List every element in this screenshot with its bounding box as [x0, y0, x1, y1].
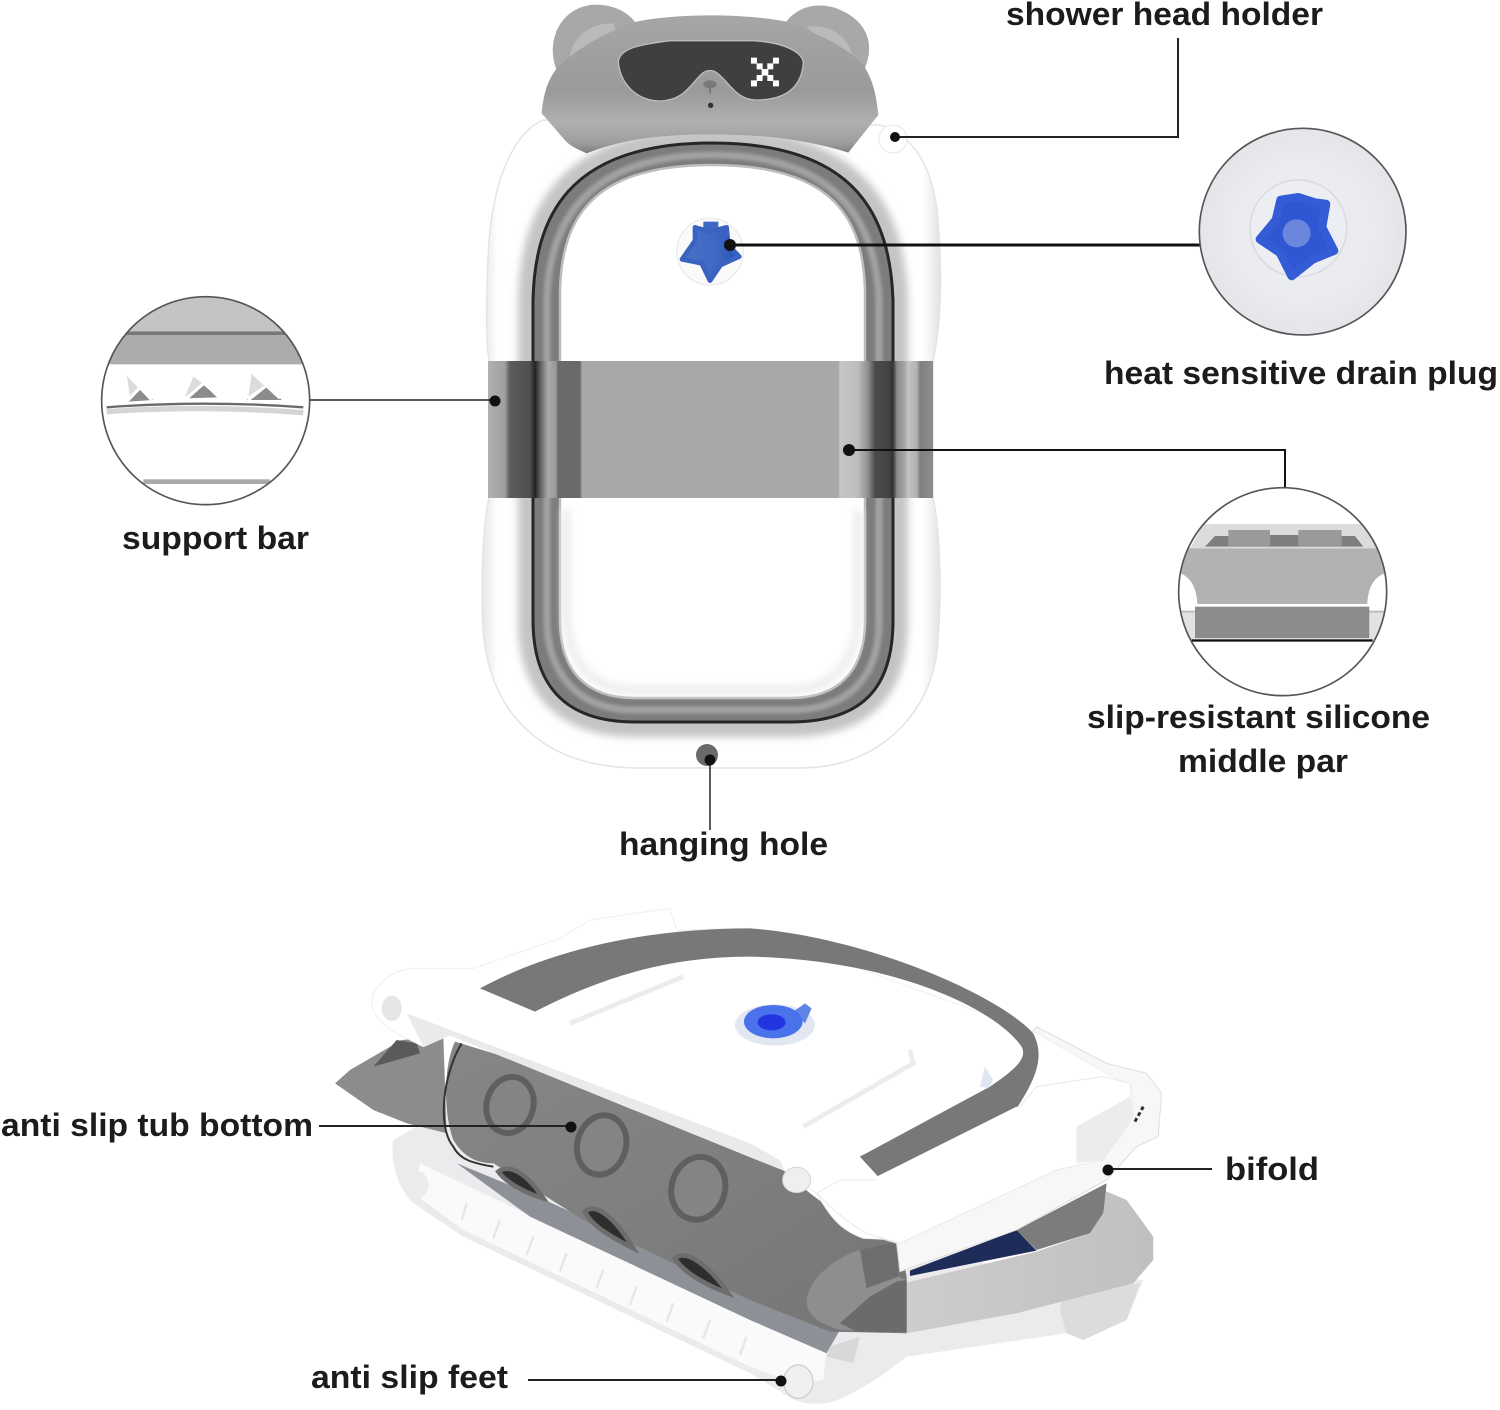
support bar detail circle	[100, 296, 310, 506]
lower white base	[392, 1100, 1143, 1404]
head rest with bear ears	[542, 5, 878, 153]
callout: hanging hole	[619, 754, 828, 862]
foot 3	[675, 1256, 728, 1293]
oval 2	[570, 1110, 633, 1180]
lower foot left	[405, 1171, 429, 1199]
left ear inner	[570, 23, 617, 60]
handle window	[860, 1097, 990, 1177]
loop inner shade	[1017, 1183, 1107, 1250]
folded drain plug	[735, 1003, 815, 1046]
callout: shower head holder	[890, 0, 1323, 142]
ring highlight	[547, 155, 879, 710]
top white frame	[372, 908, 1130, 1240]
top frame screw left	[382, 996, 402, 1021]
callout: anti slip feet: anti slip feet	[311, 1359, 508, 1395]
left ear	[553, 5, 637, 72]
right handle back rim	[863, 1027, 1162, 1272]
bath tub top view	[482, 5, 941, 768]
silicone middle band with side straps	[488, 361, 933, 498]
handle bar top	[877, 1107, 1060, 1193]
latch marks	[1135, 1107, 1143, 1122]
oval 3	[664, 1151, 732, 1226]
drain plug star	[677, 218, 743, 285]
callout: anti slip tub bottom	[1, 1107, 576, 1143]
tub basin floor	[560, 165, 865, 698]
drain plug detail circle	[1199, 128, 1406, 335]
tub outer frame	[482, 120, 941, 768]
base foot block	[1060, 1283, 1140, 1340]
collapsible silicone ring	[533, 143, 893, 722]
sunglasses	[618, 41, 803, 101]
dark blue tub opening	[910, 1230, 1037, 1276]
head shape	[542, 15, 878, 153]
gray tub bottom body	[446, 1042, 907, 1333]
silicone detail circle	[1178, 486, 1388, 696]
pixel x on lens	[751, 58, 779, 86]
anti slip ovals	[480, 1072, 732, 1226]
oval 1	[480, 1072, 540, 1138]
soft shadow around ring	[533, 143, 893, 722]
lower gray loop handle	[903, 1190, 1153, 1333]
bear mouth dot	[708, 103, 713, 108]
end cap	[807, 1242, 907, 1333]
bear nose	[703, 80, 717, 88]
callout: heat sensitive drain plug	[724, 128, 1498, 391]
foot 1	[498, 1169, 543, 1198]
handle shaded block	[1077, 1097, 1133, 1163]
right ear inner	[807, 26, 853, 60]
base white strip with ribs	[413, 1163, 827, 1383]
two line label	[1087, 699, 1430, 779]
end cap dark stripe lower	[840, 1280, 907, 1333]
left cone tip	[335, 1037, 447, 1133]
callout: slip-resistant silicone middle part	[843, 444, 1430, 779]
folded bath tub view	[335, 908, 1162, 1404]
top frame screw right	[783, 1167, 811, 1193]
callout: heat sensitive drain plug: heat sensitive drain plug	[1104, 355, 1498, 391]
callout: anti slip tub bottom: anti slip tub bottom	[1, 1107, 313, 1143]
hanging hole	[696, 744, 718, 766]
basin lower shade	[566, 510, 858, 690]
callout: bifold	[1102, 1151, 1319, 1187]
callout: support bar	[90, 290, 500, 556]
lower wedge	[827, 1337, 860, 1363]
shower head holder hole	[879, 125, 907, 153]
front right handle	[817, 1077, 1133, 1243]
callout: anti slip feet	[311, 1359, 786, 1395]
body seam line	[444, 1043, 493, 1167]
callout: hanging hole: hanging hole	[619, 826, 828, 862]
cone dark notch	[373, 1040, 420, 1067]
callout: bifold: bifold	[1225, 1151, 1319, 1187]
lower tray gray channel	[457, 1163, 840, 1353]
lower foot right	[784, 1365, 813, 1398]
gray folding ring	[480, 928, 1039, 1177]
front frame marbled edge	[407, 1013, 785, 1171]
two line label: slip-resistant silicone	[1087, 699, 1430, 735]
right ear	[785, 5, 869, 72]
bottom suction feet	[498, 1169, 728, 1293]
two line label: middle par	[1178, 743, 1348, 779]
callout: support bar: support bar	[122, 520, 309, 556]
basin blue shadow	[980, 1067, 993, 1088]
foot 2	[585, 1209, 633, 1248]
base rib marks	[462, 1203, 747, 1355]
basin emboss lines	[570, 977, 913, 1127]
end cap dark stripe upper	[860, 1242, 898, 1288]
